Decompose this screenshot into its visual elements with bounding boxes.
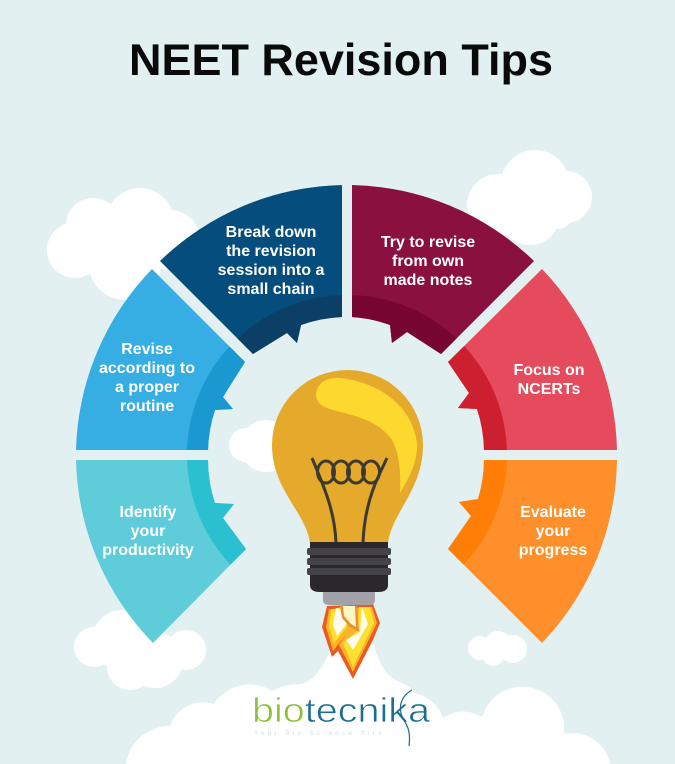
cloud: upper left	[47, 188, 200, 300]
text: break down: the revision	[226, 243, 316, 260]
text: try to revise: from own	[392, 253, 464, 270]
cloud: upper right	[467, 150, 592, 245]
inner band: maroon	[352, 295, 456, 354]
base ribs	[307, 548, 391, 575]
text: focus: Focus on	[513, 362, 585, 379]
icon: light bulb	[272, 370, 423, 605]
panel: break down the revision session	[160, 185, 342, 354]
cloud: behind bulb	[229, 420, 292, 472]
sector: blue	[76, 269, 245, 450]
logo figure on k	[400, 690, 412, 746]
text: evaluate: progress	[519, 542, 587, 559]
text: try to revise: Try to revise	[381, 234, 475, 251]
filament	[312, 458, 387, 543]
panel: revise according to routine	[76, 269, 245, 450]
screw base	[310, 542, 388, 592]
inner band: blue	[187, 346, 245, 450]
inner band: navy	[238, 295, 342, 354]
sector: navy	[160, 185, 342, 354]
panel: revise from own notes	[352, 185, 534, 354]
inner band: red	[448, 346, 507, 450]
logo: biotecnika	[252, 690, 430, 746]
cloud: bottom bank and rocket plume	[126, 640, 610, 764]
logo wordmark: biotecnika	[252, 692, 430, 730]
text: revise: Revise	[121, 341, 173, 358]
cloud: small right	[468, 631, 527, 666]
inner band: teal	[187, 460, 246, 564]
text: focus: NCERTs	[518, 381, 581, 398]
text: break down: session into a	[218, 262, 324, 279]
panel: identify your productivity	[76, 460, 246, 643]
bulb glass	[272, 370, 423, 543]
sector: orange	[448, 460, 617, 643]
panel: evaluate your progress	[448, 460, 617, 643]
sector: maroon	[352, 185, 534, 354]
title: NEET Revision Tips	[129, 36, 553, 85]
panel: focus on NCERTs	[448, 269, 617, 450]
text: identify: Identify	[120, 504, 177, 521]
text: evaluate: Evaluate	[520, 504, 586, 521]
text: try to revise: made notes	[384, 272, 473, 289]
text: identify: productivity	[102, 542, 194, 559]
inner band: orange	[448, 460, 507, 564]
logo tagline: Your Bio Science Site	[254, 731, 385, 737]
text: revise: a proper	[115, 379, 179, 396]
sector: red	[448, 269, 617, 450]
text: revise: routine	[120, 398, 174, 415]
text: evaluate: your	[536, 523, 570, 540]
sector: teal	[76, 460, 246, 643]
grey collar	[323, 590, 375, 605]
cloud: lower left	[74, 610, 206, 690]
text: revise: according to	[99, 360, 195, 377]
text: break down: Break down	[226, 224, 316, 241]
icon: rocket flames	[322, 604, 380, 679]
bulb highlight	[316, 378, 417, 493]
text: identify: your	[131, 523, 165, 540]
text: break down: small chain	[227, 281, 315, 298]
